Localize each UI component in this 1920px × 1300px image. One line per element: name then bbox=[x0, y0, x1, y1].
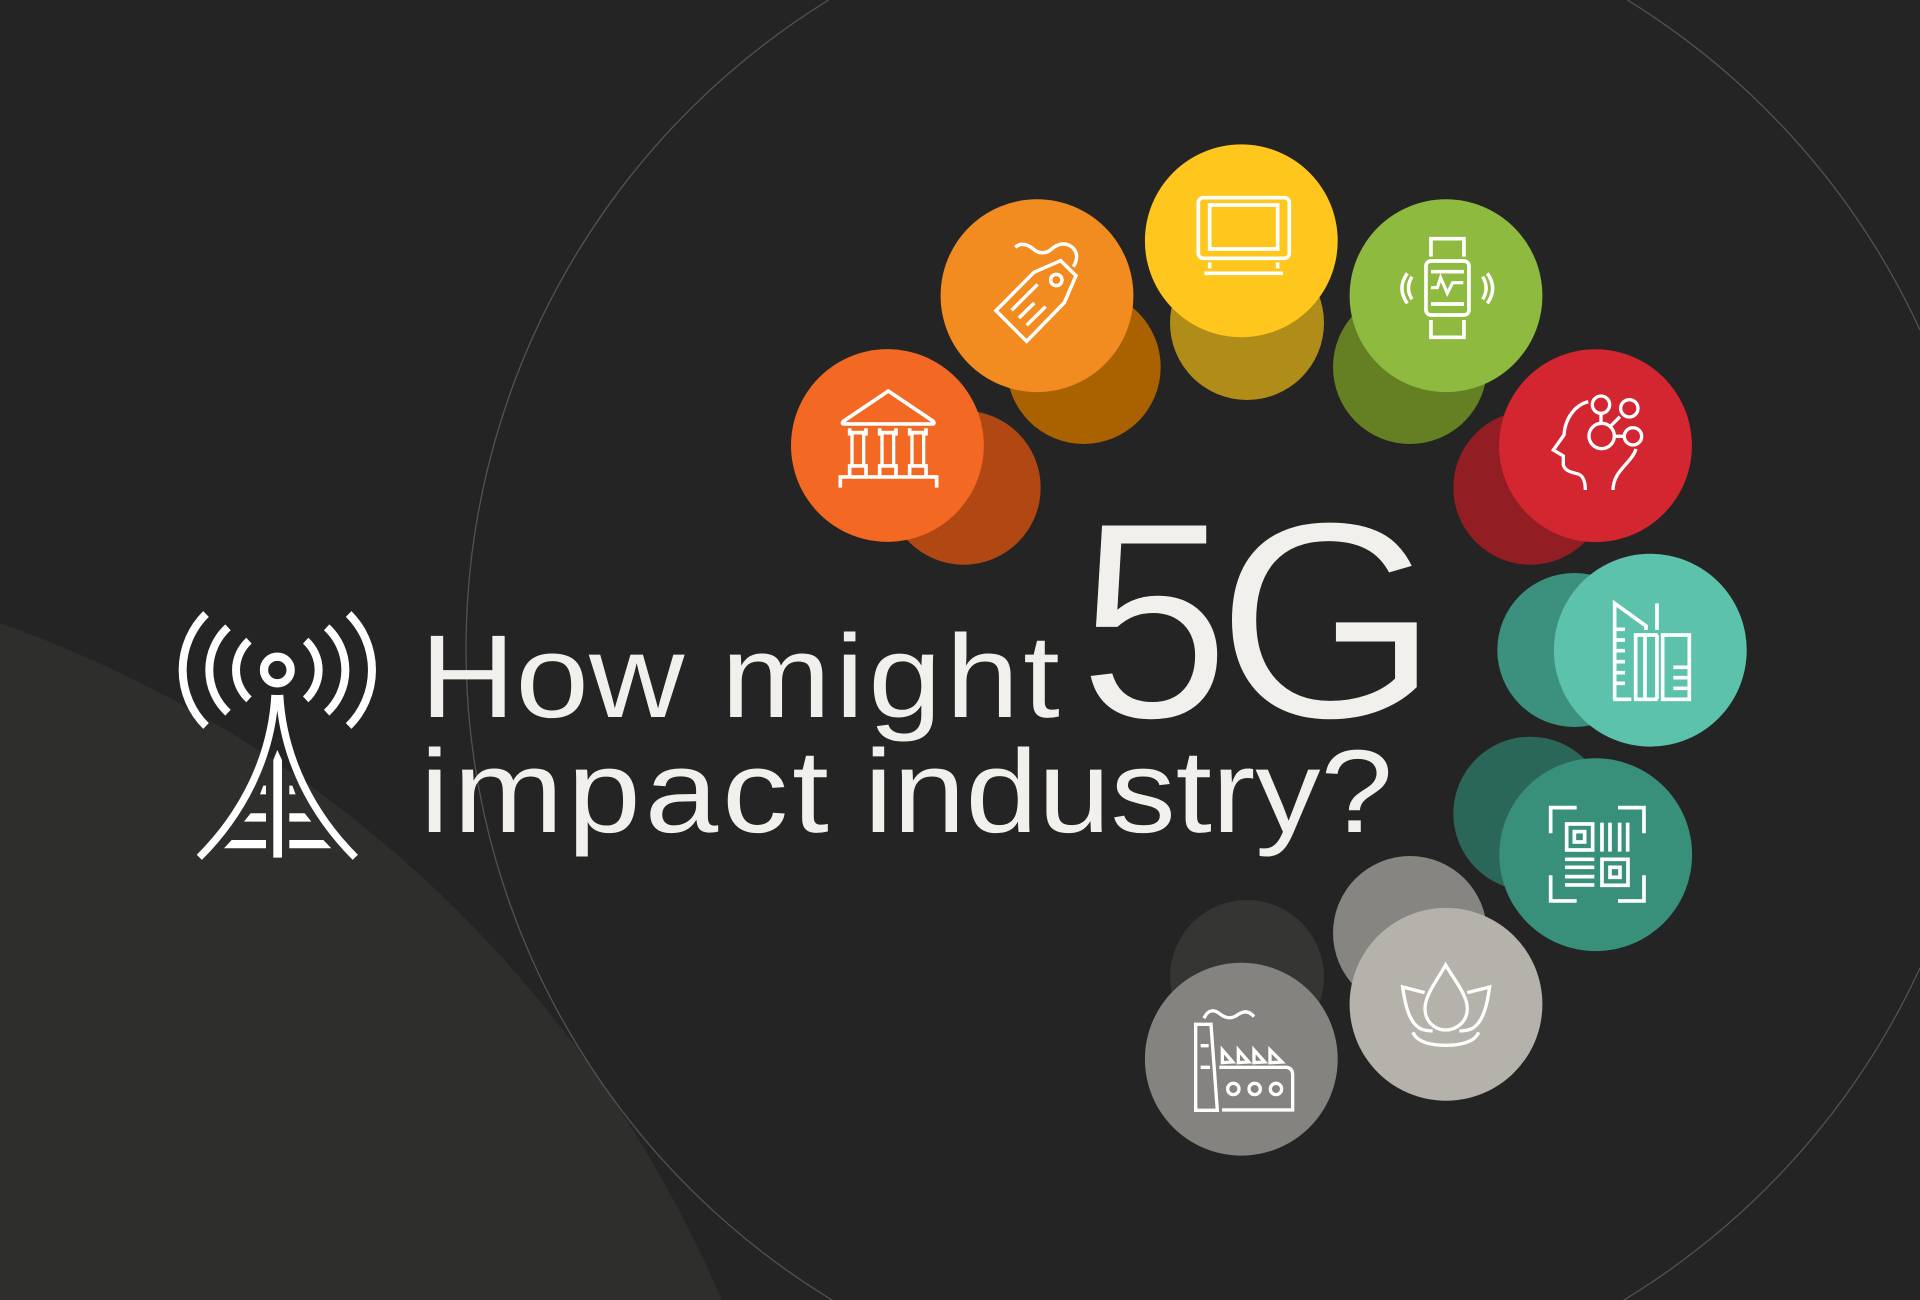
title text: G: G bbox=[1216, 464, 1440, 778]
circle: healthcare bbox=[1350, 199, 1542, 392]
circle: artificial intelligence bbox=[1499, 349, 1692, 542]
circle: banking / finance bbox=[791, 349, 984, 542]
background: thin outline circle bbox=[466, 0, 1920, 1300]
circle: media / entertainment bbox=[1145, 144, 1338, 337]
circle: wellness / utilities bbox=[1350, 908, 1542, 1101]
circle: smart cities bbox=[1554, 554, 1747, 747]
icon: price tag bbox=[996, 244, 1077, 341]
icon: city buildings bbox=[1613, 603, 1689, 699]
icon: factory bbox=[1196, 1011, 1293, 1110]
title text: How: How bbox=[420, 611, 685, 742]
circle: logistics bbox=[1499, 758, 1692, 951]
circle: retail bbox=[941, 199, 1133, 392]
shadow circles bbox=[887, 246, 1651, 1054]
icon: head with network bbox=[1553, 396, 1642, 490]
background: large lighter circle, lower left bbox=[0, 623, 722, 1300]
title text: 5: 5 bbox=[1078, 463, 1230, 778]
title text: might: might bbox=[721, 611, 1064, 742]
icon: QR code scanner bbox=[1551, 808, 1644, 901]
icon: bank building bbox=[840, 391, 937, 488]
icon: smart watch bbox=[1402, 239, 1493, 337]
icon: signal tower bbox=[183, 614, 372, 858]
title bbox=[420, 463, 1440, 858]
icon: water drop and lotus bbox=[1403, 965, 1490, 1045]
circle: manufacturing bbox=[1145, 963, 1338, 1156]
icon: screen bbox=[1198, 198, 1289, 273]
title text: impact: impact bbox=[420, 726, 833, 857]
title text: industry?: industry? bbox=[864, 726, 1393, 858]
